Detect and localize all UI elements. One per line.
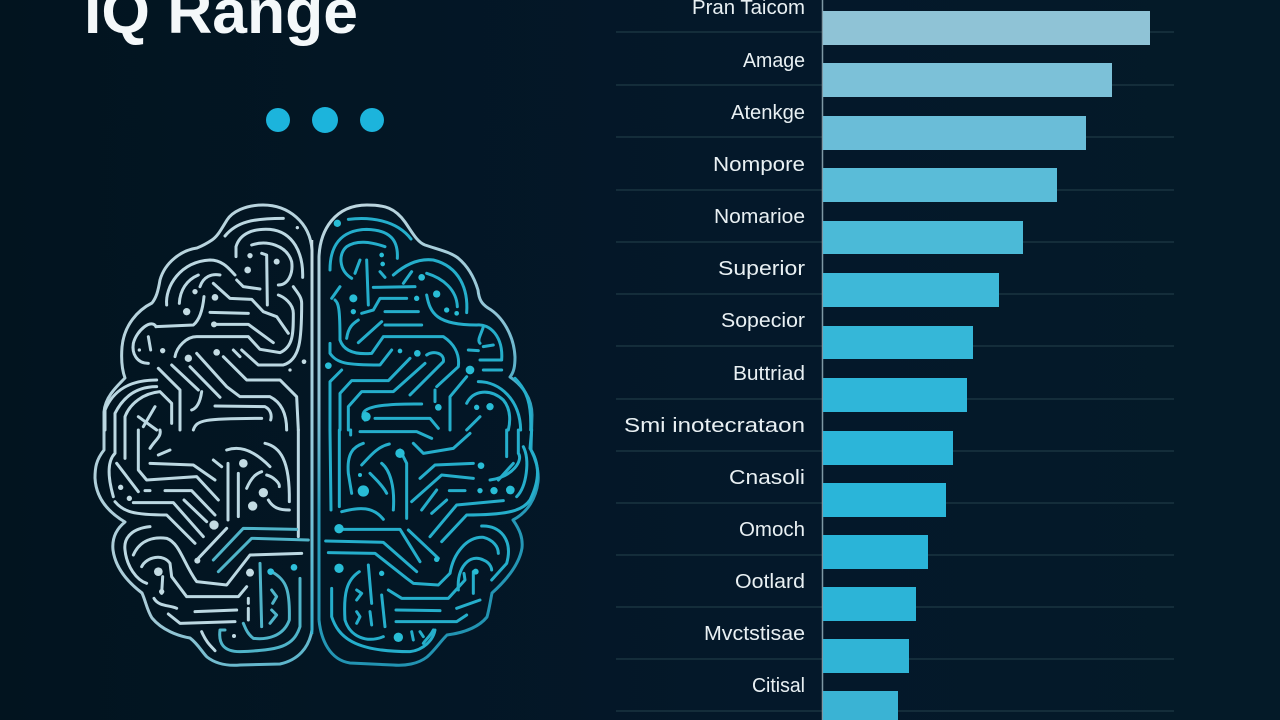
label 12: Ootlard	[735, 571, 805, 593]
label 7: Sopecior	[721, 310, 805, 332]
label 9: Smi inotecrataon	[624, 415, 805, 437]
left hemisphere traces, upper	[105, 218, 306, 430]
bar 7	[823, 326, 973, 359]
label 5: Nomarioe	[714, 206, 805, 228]
label 2: Amage	[743, 50, 805, 72]
chart: horizontal bars	[616, 0, 1174, 720]
axis line	[822, 0, 824, 720]
label 6: Superior	[718, 258, 805, 280]
label 8: Buttriad	[733, 363, 805, 385]
left hemisphere traces, lower	[109, 430, 302, 651]
bar 6	[823, 273, 999, 307]
three dots indicator	[266, 107, 384, 133]
label 10: Cnasoli	[729, 467, 805, 489]
right hemisphere outline	[319, 205, 538, 665]
bar 13	[823, 639, 909, 673]
bar 11	[823, 535, 928, 569]
label 14: Citisal	[752, 675, 805, 697]
bar 1	[823, 11, 1150, 45]
bar 4	[823, 168, 1057, 202]
label 3: Atenkge	[731, 102, 805, 124]
bar 3	[823, 116, 1086, 150]
right hemisphere traces, lower	[326, 430, 537, 652]
bar 12	[823, 587, 916, 621]
centre divider	[311, 240, 313, 634]
bar 14	[823, 691, 898, 720]
bar 5	[823, 221, 1023, 254]
left hemisphere outline	[95, 205, 312, 665]
label 4: Nompore	[713, 154, 805, 176]
bar 2	[823, 63, 1112, 97]
label 11: Omoch	[739, 519, 805, 541]
grid lines	[616, 32, 1174, 711]
bar 9	[823, 431, 953, 465]
bar 10	[823, 483, 946, 517]
label 13: Mvctstisae	[704, 623, 805, 645]
right hemisphere traces, upper	[325, 219, 531, 430]
icon: circuit brain	[95, 205, 538, 665]
bar 8	[823, 378, 967, 412]
left hemisphere teal transition traces	[213, 528, 308, 652]
